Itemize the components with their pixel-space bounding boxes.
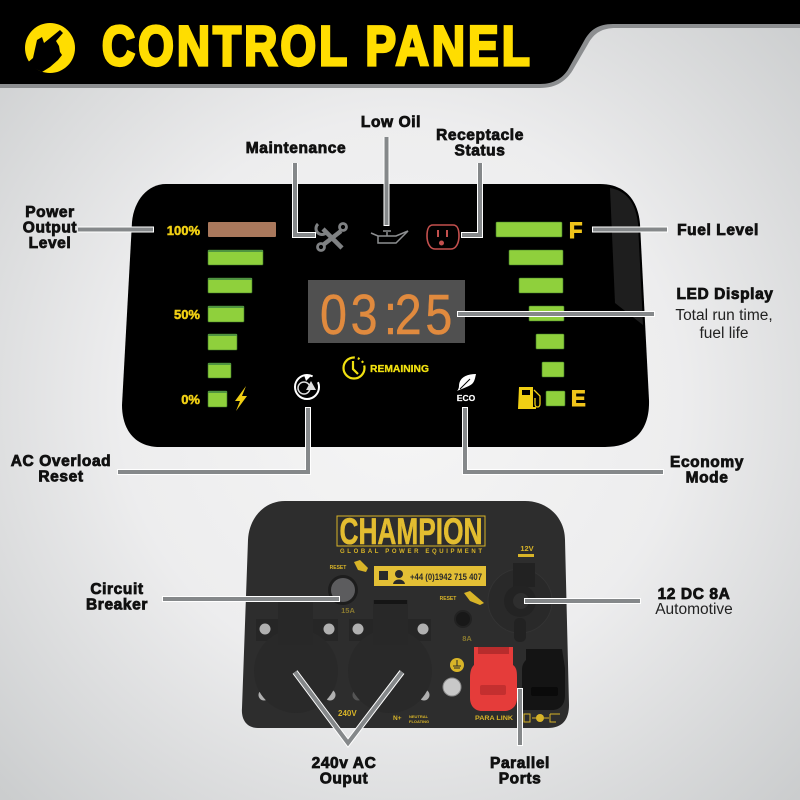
ground terminal [443,658,464,696]
icon: AC overload reset [295,375,319,399]
leader: circuit breaker [162,596,340,602]
remaining label: REMAINING [370,363,429,375]
label: LED display: Total run time, [675,307,773,324]
phone number plate: +44 (0)1942 715 407 [410,572,482,582]
leader: parallel [517,688,523,746]
label: parallel ports: Parallel [490,755,550,772]
fuel scale letters [569,218,586,411]
icon: remaining clock [344,358,364,378]
circuit breaker reset 15A: RESET [330,565,346,571]
label: economy mode: Economy [670,454,744,471]
leader: economy [465,407,664,472]
title: CONTROL PANEL [102,14,533,77]
power output bars [208,222,276,407]
label: power output level: Output [23,220,77,236]
icon: low oil can [371,231,408,243]
panel small labels: N+ [393,715,402,722]
panel small labels: NEUTRAL [409,714,429,719]
240V socket left [254,600,338,713]
Champion logo: CHAMPION [340,511,482,552]
fuel scale letters: E [571,386,586,411]
label: 240v AC output: Ouput [320,770,368,788]
power scale labels: 100% [167,223,200,238]
leader: LED display [457,311,655,317]
panel: generator outlets [242,501,569,728]
label: AC overload reset: AC Overload [11,453,111,470]
label: low oil: Low Oil [361,114,421,131]
panel small labels: FLOATING [409,719,429,724]
LED time display: 03:25 [320,283,452,347]
icon: eco leaf: ECO [457,393,476,403]
fuel scale letters: F [569,218,582,243]
leader: AC overload [117,407,308,472]
label: AC overload reset: Reset [38,468,84,486]
leader: 240V [295,672,402,743]
leader: receptacle [461,163,480,235]
icon: maintenance tools [316,224,346,250]
8A reset button: RESET [440,596,456,602]
parallel port black cover [522,649,565,710]
8A reset button [440,591,484,643]
circuit breaker reset 15A: 15A [341,606,355,615]
Champion logo: GLOBAL POWER EQUIPMENT [340,549,482,555]
label: 12 DC 8A automotive: 12 DC 8A [658,586,730,603]
label: parallel ports: Ports [499,770,541,788]
label: circuit breaker: Circuit [90,581,144,598]
leader: power output [78,226,154,232]
icon: eco leaf [457,374,476,403]
icon: fuel pump [518,387,540,409]
leader: low oil [384,137,390,226]
label: LED display [675,286,774,342]
panel: LED control display [122,184,649,447]
label: receptacle status: Status [455,142,505,160]
label: maintenance: Maintenance [246,140,346,157]
label: LED display: LED Display [676,286,774,303]
panel small labels: 240V [338,709,357,718]
label: fuel level: Fuel Level [677,222,759,239]
label: power output level: Power [25,204,75,221]
power scale labels [167,223,200,407]
icon: receptacle status [427,225,459,249]
label: receptacle status: Receptacle [436,127,524,144]
leader: 12V [524,598,641,604]
Champion logo [337,511,485,555]
icon: lightning bolt [235,386,247,411]
power scale labels: 0% [181,392,200,407]
leader: fuel level [592,226,668,232]
header banner [0,0,800,88]
label: LED display: fuel life [699,325,749,342]
12V automotive socket [488,544,552,642]
phone number plate [374,566,486,586]
label: power output level: Level [29,235,71,252]
leader: maintenance [295,163,316,235]
label: economy mode: Mode [686,470,728,486]
fuel level bars [496,222,565,406]
icon: pointing hand logo [25,23,75,73]
240V socket right [348,600,432,713]
label: 12 DC 8A automotive [655,586,733,618]
panel small labels [338,709,560,724]
parallel port red cover [470,647,517,711]
label: 240v AC output: 240v AC [312,755,376,772]
circuit breaker reset 15A [328,560,368,615]
label: circuit breaker: Breaker [86,596,148,614]
power scale labels: 50% [174,307,200,322]
12V automotive socket: 12V [520,544,534,553]
label: 12 DC 8A automotive: Automotive [655,601,733,618]
panel small labels: PARA LINK [475,715,513,722]
8A reset button: 8A [462,634,472,643]
